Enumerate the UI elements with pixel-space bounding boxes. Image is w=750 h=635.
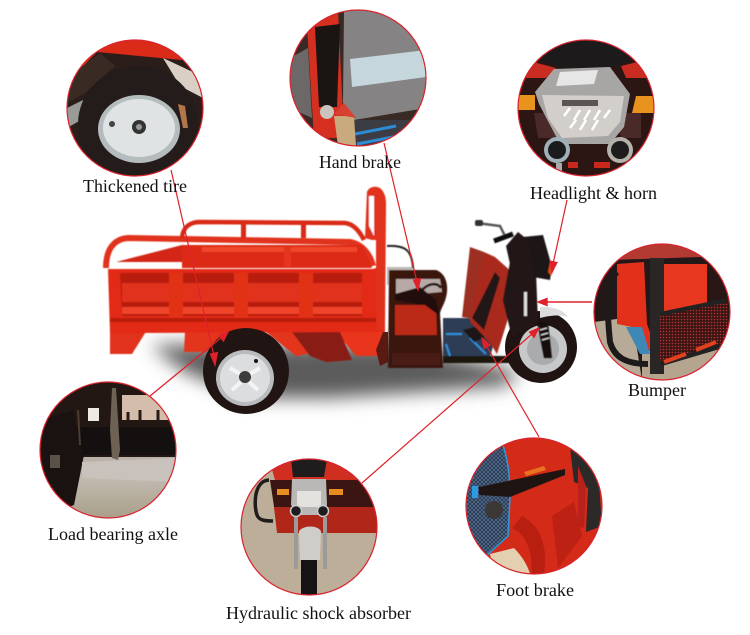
label: foot brake: Foot brake [496, 580, 574, 600]
ground shadow [150, 345, 520, 398]
arrow: hydraulic shock absorber [362, 328, 539, 483]
panel: load bearing axle [40, 382, 176, 518]
cab door and seat [387, 246, 447, 368]
front wheel [505, 307, 577, 383]
steering column and headlight [475, 220, 554, 358]
panel: bumper [594, 244, 730, 380]
vehicle: electric cargo tricycle [106, 187, 577, 414]
label: thickened tire: Thickened tire [83, 176, 187, 196]
undercarriage [376, 332, 388, 366]
leg shield [462, 247, 517, 354]
arrow: bumper [538, 298, 592, 306]
floorboard [443, 318, 512, 363]
arrow: foot brake [482, 338, 539, 437]
arrows: callout leader lines [150, 143, 592, 483]
panel: hand brake [290, 10, 426, 146]
arrow: thickened tire [171, 170, 218, 365]
label: hand brake: Hand brake [319, 152, 401, 172]
label: hydraulic shock absorber: Hydraulic shock absorber [226, 603, 411, 623]
arrow: headlight and horn [550, 200, 567, 272]
panel: foot brake [466, 438, 602, 574]
arrow: hand brake [384, 143, 420, 290]
rear wheel [203, 328, 289, 414]
panel: headlight and horn [518, 36, 654, 176]
label: load bearing axle: Load bearing axle [48, 524, 178, 544]
arrow: load bearing axle [150, 332, 228, 396]
cargo bed [106, 187, 386, 362]
panel: thickened tire [67, 40, 203, 182]
label: headlight and horn: Headlight & horn [530, 183, 657, 203]
label: bumper: Bumper [628, 380, 686, 400]
panel: hydraulic shock absorber [241, 459, 377, 595]
